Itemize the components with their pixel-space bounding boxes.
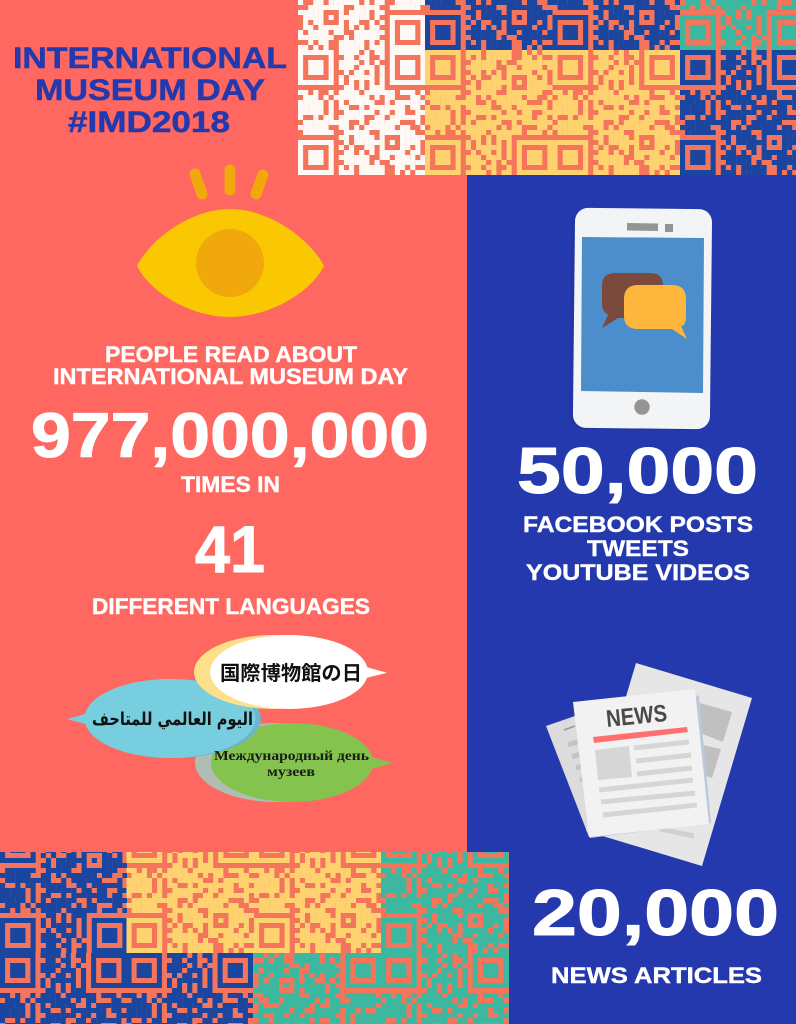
text: Japanese: 国際博物館の日 — [220, 657, 362, 686]
bubble: Russian — [195, 723, 393, 802]
number: 50,000: 50,000 — [517, 434, 758, 507]
icon: newspapers — [546, 663, 752, 866]
icon: smartphone — [569, 208, 712, 431]
text: different languages: DIFFERENT LANGUAGES — [92, 594, 370, 619]
text: Arabic: اليوم العالمي للمتاحف — [92, 709, 253, 730]
text: social media list — [523, 512, 753, 585]
speech bubbles: languages — [67, 635, 393, 802]
article lines — [599, 742, 697, 815]
text: social media list: TWEETS — [587, 536, 689, 561]
text: people read about: INTERNATIONAL MUSEUM DAY — [53, 364, 408, 389]
panel: QR mosaic bottom — [0, 828, 509, 1024]
front sheet shadow — [589, 695, 711, 838]
bubble: Arabic — [67, 679, 261, 758]
text: people read about: PEOPLE READ ABOUT — [105, 342, 358, 367]
number: 20,000: 20,000 — [532, 876, 779, 949]
number: 41: 41 — [195, 512, 265, 586]
text: Russian — [214, 749, 370, 780]
title: MUSEUM DAY — [35, 74, 265, 107]
text: news articles: NEWS ARTICLES — [551, 963, 762, 988]
title: #IMD2018 — [68, 106, 230, 139]
red rule — [593, 727, 688, 743]
text: times in: TIMES IN — [181, 472, 280, 497]
bubble: Japanese — [194, 635, 387, 709]
panel: QR mosaic top — [298, 0, 796, 175]
text: Russian: музеев — [267, 765, 315, 780]
text: people read about — [53, 342, 408, 389]
back right sheet — [586, 663, 752, 866]
number: 977,000,000: 977,000,000 — [31, 401, 429, 471]
text: social media list: YOUTUBE VIDEOS — [526, 560, 750, 585]
article image — [595, 746, 632, 780]
title — [13, 42, 287, 139]
headline: NEWS: NEWS — [605, 700, 668, 733]
front sheet — [573, 689, 709, 837]
icon: chat bubbles — [602, 273, 687, 339]
panel: blue right column — [467, 175, 796, 1024]
back left sheet — [546, 690, 695, 837]
title: INTERNATIONAL — [13, 42, 287, 75]
text: social media list: FACEBOOK POSTS — [523, 512, 753, 537]
icon: eye — [137, 170, 324, 317]
text: Russian: Международный день — [214, 749, 370, 764]
